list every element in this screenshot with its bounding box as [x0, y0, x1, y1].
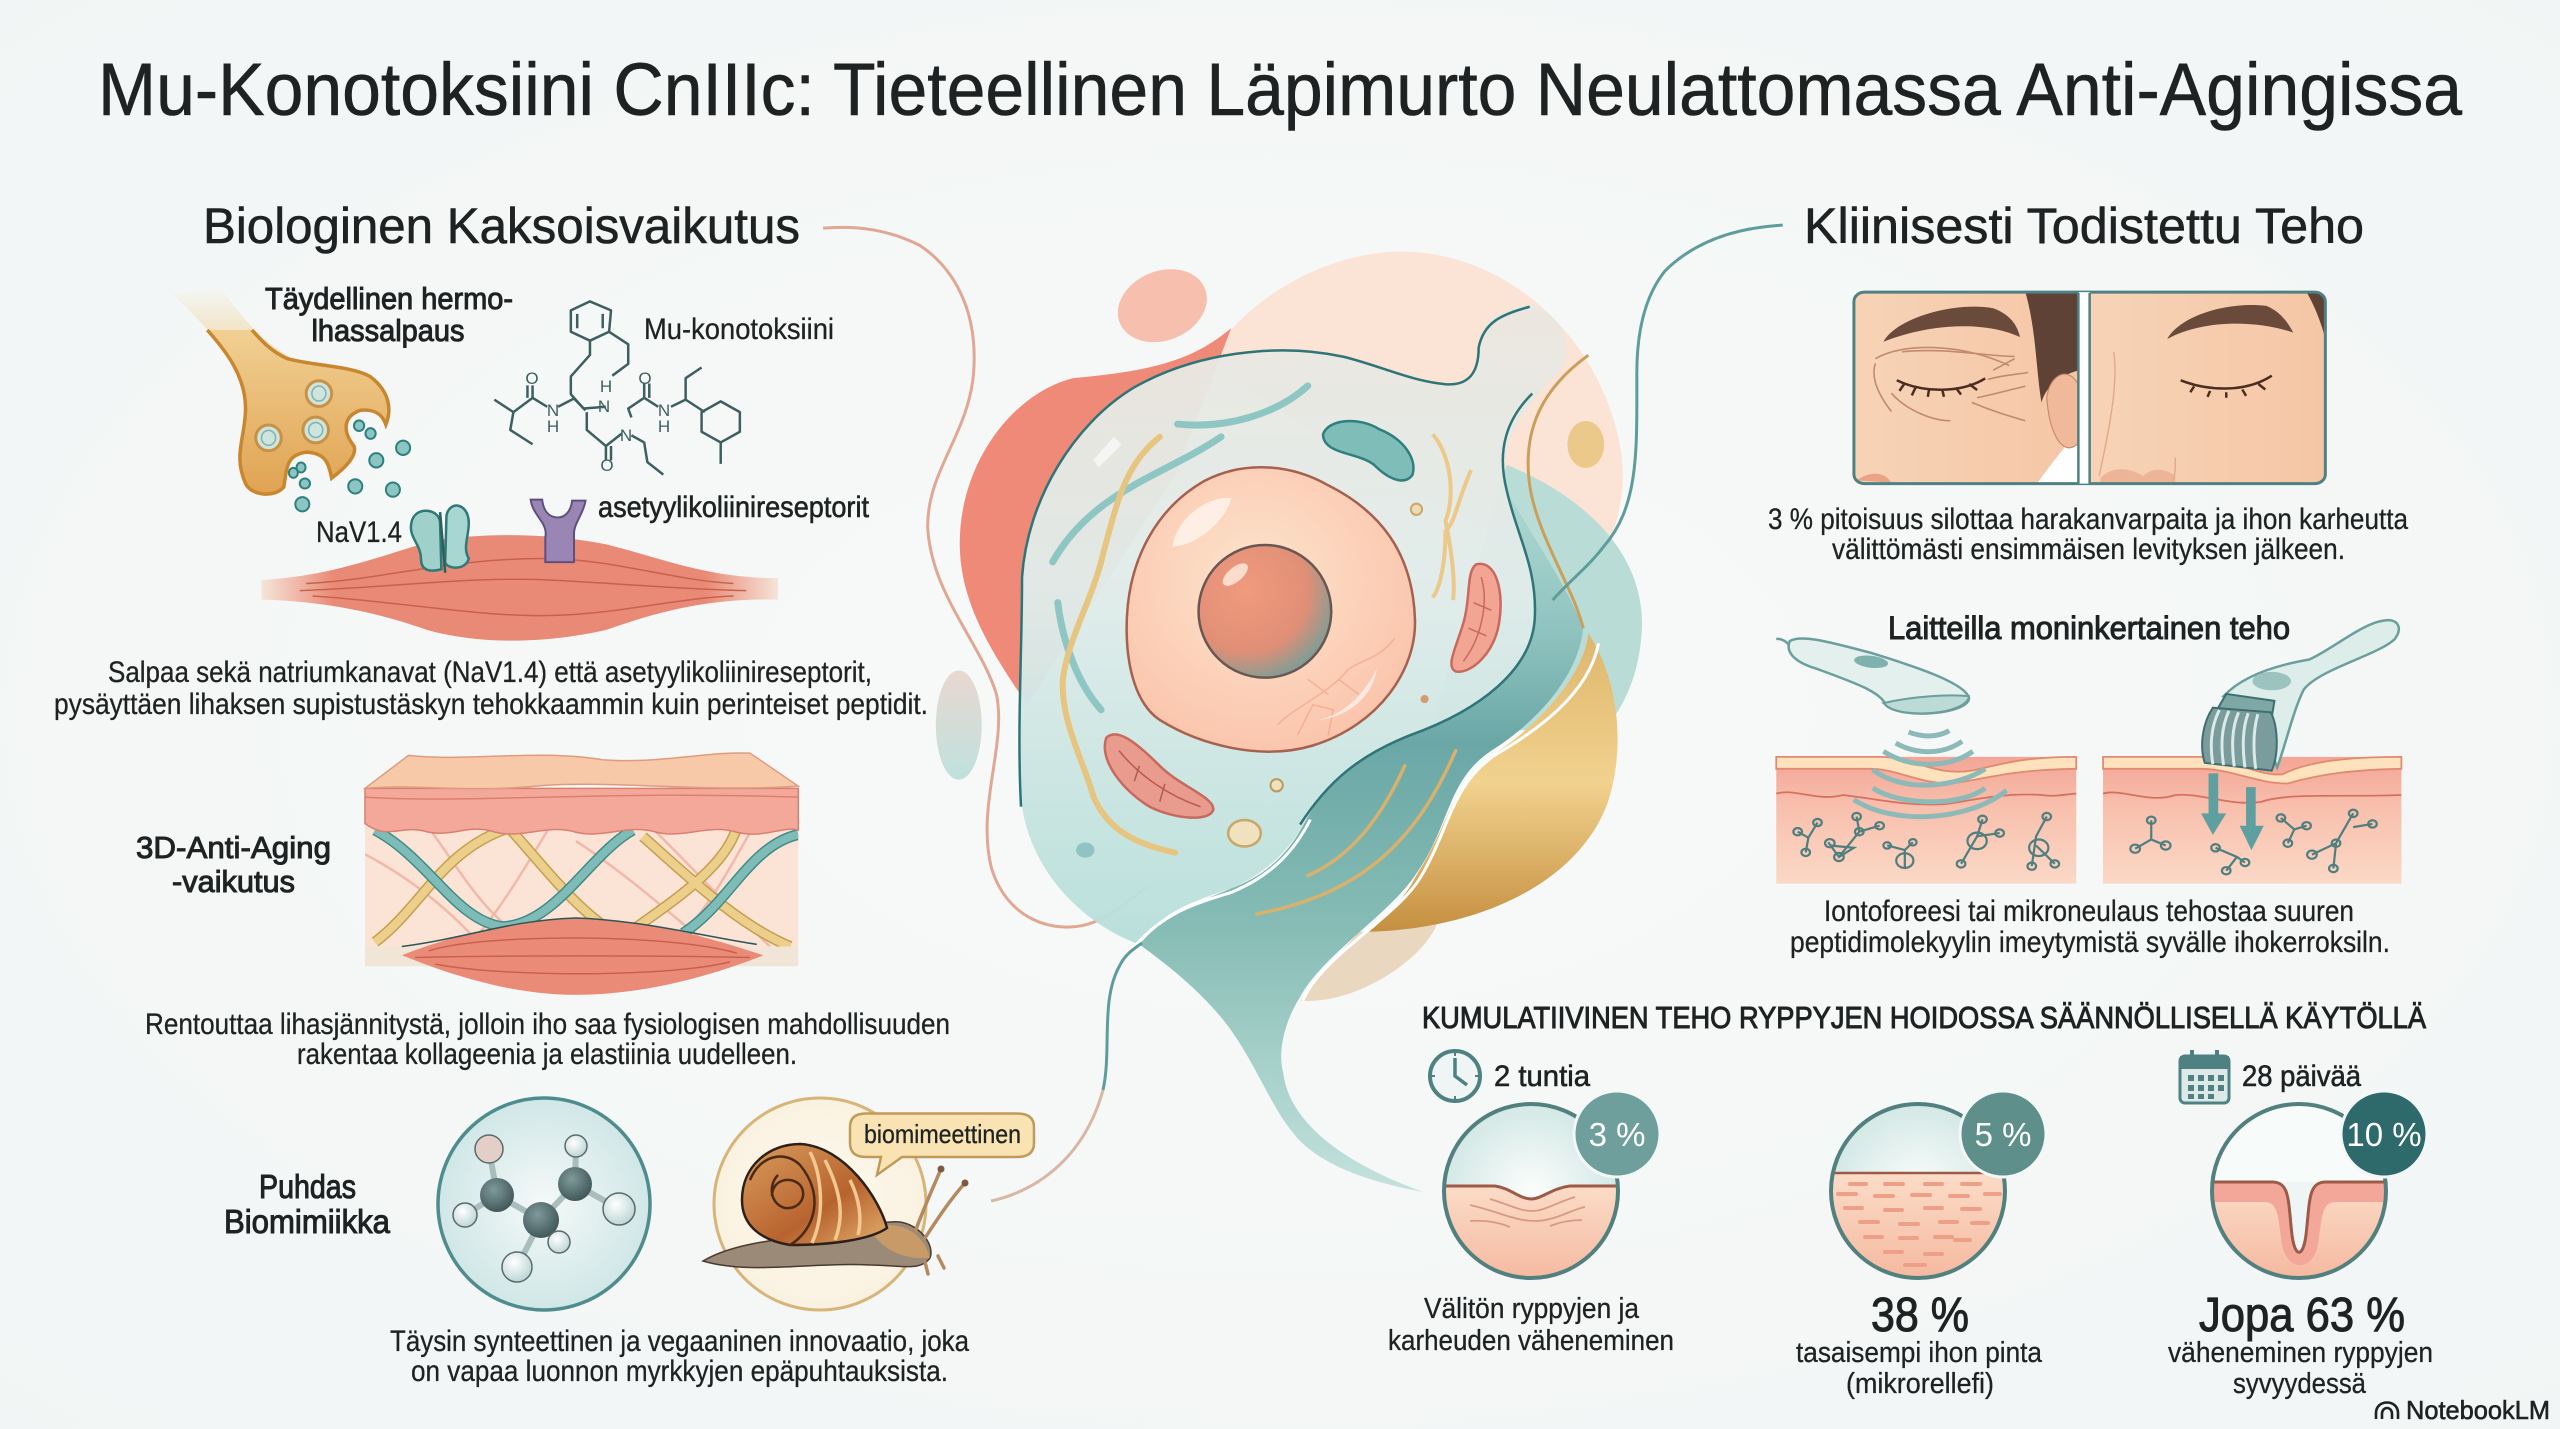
molecule atom labels: O — [600, 456, 614, 475]
molecule atom labels: N — [658, 401, 670, 420]
tendon band — [365, 947, 798, 966]
stage 2: 5 percent — [1831, 1091, 2046, 1278]
label: synapse block: Täydellinen hermo- — [265, 281, 513, 316]
shell spiral — [750, 1157, 814, 1245]
downward arrows — [2201, 773, 2264, 850]
mitochondrion inner folds lower — [1119, 751, 1201, 807]
molecule atom labels: N — [620, 426, 632, 445]
label: pure biomimicry: Puhdas — [259, 1168, 356, 1205]
text block: iontophoresis — [1790, 895, 2390, 959]
text block: iontophoresis: peptidimolekyylin imeytymistä syvälle ihokerroksiln. — [1790, 926, 2390, 959]
dermis fibres and strands — [365, 828, 798, 947]
text: immediate reduction — [1388, 1293, 1674, 1357]
mitochondrion: teal — [1323, 421, 1413, 480]
nucleus highlights — [1173, 498, 1377, 720]
dermis — [365, 823, 798, 947]
icon: calendar — [2180, 1050, 2229, 1103]
text block: relax — [145, 1008, 950, 1071]
before and after face panel — [1854, 292, 2325, 485]
nucleus — [1127, 467, 1415, 752]
text block: crow's feet: 3 % pitoisuus silottaa harakanvarpaita ja ihon karheutta — [1768, 503, 2408, 536]
molecule atom labels: H — [600, 377, 612, 396]
muscle — [261, 535, 778, 641]
deep muscle striations — [415, 938, 750, 974]
text block: dual action — [54, 656, 928, 721]
label: 28 days: 28 päivää — [2242, 1060, 2361, 1093]
peptide molecules: right — [2130, 810, 2377, 874]
callout: biomimeettinen: biomimeettinen — [864, 1119, 1021, 1149]
title: Mu-Konotoksiini CnIIIc: Tieteellinen Läpimurto Neulattomassa Anti-Agingissa — [98, 48, 2463, 131]
nerve terminal illustration — [172, 287, 410, 511]
skin panel: microneedling — [2103, 757, 2401, 884]
text block: crow's feet: välittömästi ensimmäisen levityksen jälkeen. — [1832, 533, 2345, 566]
skin cross-section illustration — [365, 753, 798, 995]
stage 1: 3 percent — [1444, 1091, 1660, 1280]
text block: dual action: Salpaa sekä natriumkanavat (NaV1.4) että asetyylikoliinireseptorit, — [108, 656, 872, 689]
icon: molecule in sphere — [438, 1098, 650, 1310]
molecule atom labels: N — [547, 401, 559, 420]
label: synapse block — [265, 281, 513, 348]
NotebookLM logo: NotebookLM — [2406, 1395, 2550, 1425]
text: immediate reduction: Välitön ryppyjen ja — [1424, 1293, 1640, 1325]
connector: clinical teal line — [1553, 225, 1783, 600]
text block: relax: rakentaa kollageenia ja elastiinia uudelleen. — [297, 1038, 797, 1071]
backdrop blob: coral — [960, 328, 1231, 705]
backdrop blob: light teal — [1430, 465, 1642, 730]
cell body — [1020, 304, 1567, 944]
dermal layer — [365, 788, 798, 834]
stage 3: 10 percent — [2212, 1091, 2427, 1278]
teal cytoplasm flow and tail — [1139, 490, 1583, 1192]
cell membrane — [1019, 307, 1535, 825]
text: depth reduction: väheneminen ryppyjen — [2168, 1337, 2433, 1369]
strand: lower fibres — [1257, 751, 1456, 914]
strand: small gold branch — [1433, 434, 1471, 600]
section heading: clinical: Kliinisesti Todistettu Teho — [1804, 198, 2364, 254]
stat: up to 63 %: Jopa 63 % — [2199, 1289, 2405, 1342]
frame — [1854, 292, 2325, 484]
head highlight — [870, 1225, 930, 1258]
snail foot and head — [703, 1222, 931, 1268]
molecule atom labels: H — [658, 417, 670, 436]
label: pure biomimicry — [224, 1168, 391, 1240]
badge: 3 %: 3 % — [1589, 1116, 1645, 1153]
text block: iontophoresis: Iontoforeesi tai mikroneulaus tehostaa suuren — [1824, 895, 2354, 928]
molecule atom labels: H — [547, 417, 559, 436]
epidermis top — [365, 753, 798, 789]
mitochondrion: lower left — [1105, 734, 1213, 818]
callout: biomimeettinen — [850, 1114, 1034, 1175]
badge: 5 %: 5 % — [1975, 1116, 2031, 1153]
badge: 10 %: 10 % — [2346, 1116, 2422, 1153]
text block: crow's feet — [1768, 503, 2408, 566]
tentacles — [915, 1169, 965, 1274]
text: depth reduction — [2168, 1337, 2433, 1400]
axon tail — [172, 287, 300, 380]
vesicles — [1076, 437, 1429, 858]
text: smoother surface: tasaisempi ihon pinta — [1796, 1337, 2043, 1369]
skin panel: iontophoresis — [1776, 757, 2076, 884]
label: 3D anti-aging: -vaikutus — [172, 864, 295, 899]
snail shell — [742, 1144, 887, 1245]
molecule atom labels: O — [638, 369, 652, 388]
sodium channel NaV1.4 — [411, 506, 469, 573]
white contours — [1132, 643, 1599, 1001]
label: synapse block: lhassalpaus — [312, 313, 464, 348]
badge: 10 % — [2341, 1091, 2427, 1177]
label: receptors: asetyylikoliinireseptorit — [598, 491, 870, 524]
molecule: mu-conotoxin — [494, 301, 740, 475]
label: 3D anti-aging: 3D-Anti-Aging — [136, 830, 331, 865]
label: 3D anti-aging — [136, 830, 331, 899]
text block: relax: Rentouttaa lihasjännitystä, jolloin iho saa fysiologisen mahdollisuuden — [145, 1008, 950, 1041]
backdrop blob: gold — [1369, 633, 1618, 932]
released neurotransmitters — [289, 420, 410, 511]
stat: 38 %: 38 % — [1871, 1289, 1969, 1342]
accent oval: left — [936, 671, 982, 780]
heading: cumulative: KUMULATIIVINEN TEHO RYPPYJEN HOIDOSSA SÄÄNNÖLLISELLÄ KÄYTÖLLÄ — [1422, 1000, 2426, 1035]
label: 2 hours: 2 tuntia — [1494, 1060, 1590, 1093]
text: smoother surface: (mikrorellefi) — [1846, 1368, 1994, 1400]
central cell illustration — [823, 225, 1783, 1192]
derma roller — [2202, 620, 2399, 771]
vesicle rings — [261, 386, 326, 445]
strand: teal endoplasmic reticulum — [1053, 386, 1308, 710]
nucleus texture — [1277, 638, 1394, 735]
terminal body — [207, 330, 389, 494]
strand: gold fibre right — [1528, 355, 1588, 628]
before — [1854, 292, 2079, 485]
mitochondrion: right — [1451, 564, 1501, 672]
label: Mu-konotoksiini: Mu-konotoksiini — [644, 313, 834, 346]
icon: clock — [1430, 1051, 1480, 1101]
nucleolus highlight — [1219, 559, 1252, 590]
backdrop blob: beige — [1300, 922, 1438, 1001]
accent ellipse: pink — [1107, 256, 1218, 355]
text block: vegan: on vapaa luonnon myrkkyjen epäpuhtauksista. — [411, 1355, 948, 1388]
muscle striations — [300, 559, 746, 616]
text block: vegan: Täysin synteettinen ja vegaaninen innovaatio, joka — [390, 1325, 969, 1358]
label: pure biomimicry: Biomimiikka — [224, 1203, 391, 1240]
molecule atom labels: O — [525, 369, 539, 388]
nucleolus — [1199, 545, 1331, 678]
peptide molecules: left — [1793, 813, 2059, 870]
after — [2090, 292, 2325, 485]
acetylcholine receptor — [531, 500, 586, 562]
badge: 5 % — [1960, 1091, 2046, 1177]
heading: devices: Laitteilla moninkertainen teho — [1888, 610, 2290, 646]
muscle with receptors — [261, 500, 778, 641]
vesicles in terminal — [256, 381, 332, 451]
molecule atom labels — [525, 369, 670, 475]
text: smoother surface — [1796, 1337, 2043, 1400]
tentacle tips — [938, 1166, 944, 1172]
device comparison illustrations — [1776, 620, 2401, 884]
ultrasound waves — [1854, 731, 2007, 817]
backdrop blob: peach — [1206, 252, 1623, 577]
strand: gold fibre — [1063, 437, 1175, 853]
shell bands — [810, 1152, 860, 1243]
text block: vegan — [390, 1325, 969, 1388]
text: depth reduction: syvyydessä — [2233, 1368, 2367, 1400]
molecule atom labels: N — [598, 397, 610, 416]
mitochondrion inner folds — [1463, 577, 1491, 661]
dermal layer line — [365, 795, 798, 799]
badge: 3 % — [1574, 1091, 1660, 1177]
section heading: biological: Biologinen Kaksoisvaikutus — [203, 198, 800, 254]
text: immediate reduction: karheuden väheneminen — [1388, 1325, 1674, 1357]
deep muscle — [402, 918, 763, 995]
text block: dual action: pysäyttäen lihaksen supistustäskyn tehokkaammin kuin perinteiset peptidit. — [54, 688, 928, 721]
connector: coral line — [823, 227, 1155, 927]
iontophoresis wand — [1776, 638, 1969, 714]
connector: snail to cell — [991, 943, 1142, 1201]
label: NaV1.4: NaV1.4 — [316, 516, 402, 549]
icon: snail — [703, 1098, 968, 1310]
accent ellipse: gold — [1567, 421, 1604, 468]
